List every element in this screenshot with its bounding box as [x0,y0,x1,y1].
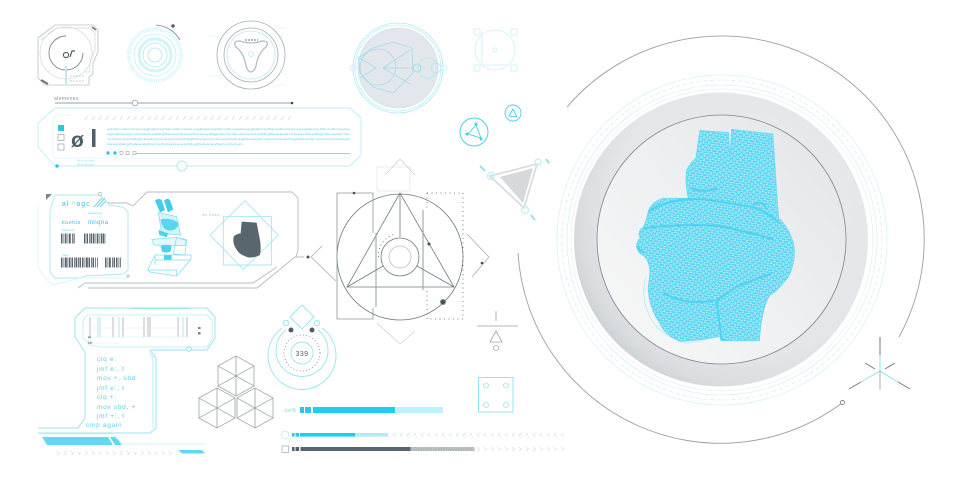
icon: grey triangle with nodes [480,159,549,220]
card title: fl [72,200,76,205]
panel: barcode card: mnqna [88,220,109,226]
panel: specimen frame outline [78,192,304,288]
panel: barcode card [38,192,129,285]
hatch strip [83,116,293,120]
icon: circle with corner squares [474,29,517,71]
icon: concentric ring target [268,305,336,389]
bars: bottom-left decorative [40,434,205,455]
thumbnail: specimen in squares: sn h4sn [202,213,220,217]
icon: radial cyan gauge [129,24,181,81]
assembly code: jmf e:, t [96,385,125,392]
icon: crosshair star [849,337,910,390]
icon: square with four dots [478,378,513,412]
panel: code and chart terminal [38,308,215,433]
assembly code: jmf +:, t [96,413,125,420]
icon: concentric ring target: 339 [296,351,308,358]
small text block [107,127,351,146]
bottom node: #finis amerits [77,158,95,162]
icon: hexagon cubes [199,356,273,428]
assembly code: mov +, sbd [97,375,136,382]
small text block: tsuopbkgjhdeicayfqrmnlxzwvtsuopbkgjhdeicayfqrmnlxzwv [107,142,244,146]
panel: barcode card: patosens [62,228,75,232]
card labels: suspicious [88,211,103,215]
progress bar: cyan percent: .ce% [283,408,297,414]
outer arcs [518,36,924,443]
card title: al [62,201,69,208]
assembly code: cmp again [86,422,122,429]
progress bar: cyan percent [283,407,443,414]
heart wireframe [637,129,794,343]
assembly code: clq e: [97,356,117,363]
bottom node: #finis amerits [77,162,95,166]
lens circle with schematic [350,23,447,113]
progress bar: cyan track [281,431,565,439]
icon: left chevron and node [306,246,336,281]
panel: barcode card: kuetus [62,220,81,226]
card title: ogc [76,201,91,208]
assembly code [86,356,136,429]
spectrum chart [88,317,200,345]
spectrum chart: tile [88,341,93,345]
status dots [106,151,350,155]
logo glyph: ø [71,129,84,152]
barcodes [61,234,121,268]
assembly code: clq +: [97,394,117,401]
dashed rings [557,75,887,405]
icon: octagonal dial [38,25,98,85]
selection squares [58,125,64,150]
icon: microscope [148,199,191,276]
small text block: kgjhdeicayfqrmnlxzwvtsuopbkgjhdeicayfqrmnlxzwvtsuopbkgjhdeicayfqrmnlxzwvtsuopbkgjhdeicayfqrmnlxzwvtsuopbkgjhdeicayfqrmnlx [107,132,351,136]
geometric diagram [337,159,489,344]
progress bar: slate track [282,446,565,452]
icon: triad dial [208,21,287,89]
large circular scanner [518,36,924,443]
small text block: mnlxzwvtsuopbkgjhdeicayfqrmnlxzwvtsuopbkgjhdeicayfqrmnlxzwvtsuopbkgjhdeicayfqrmnlxzwvtsuopbkgjhdeicayfqrmnlxzwvtsuopbkgjh [107,137,351,141]
icon: triangle badge small [505,105,521,121]
grey dish [574,92,868,386]
assembly code: mov sbd, + [97,404,136,411]
small text block: aybfqrmnlkxzwvtsuopgjhdeicaybfqrmnlkxzwvtsuopgjhdeicaybfqrmnlkxzwvtsuopgjhdeicaybfqrmnlkxzwvtsuopgjhdeicaybfqrmnlkxzwvtsu [107,127,351,131]
panel: barcode card: trans [62,253,69,257]
panel: elements header line: alemenes [54,96,79,102]
icon: triangle badge large [460,118,488,146]
logo glyph [71,129,96,152]
panel: elements header line [54,96,293,106]
panel: data text plate [38,108,361,171]
assembly code: jmf e:, t [96,366,125,373]
thumbnail: specimen in squares [202,201,278,269]
icon: divider with triangle [477,311,518,350]
bottom node [55,158,187,171]
